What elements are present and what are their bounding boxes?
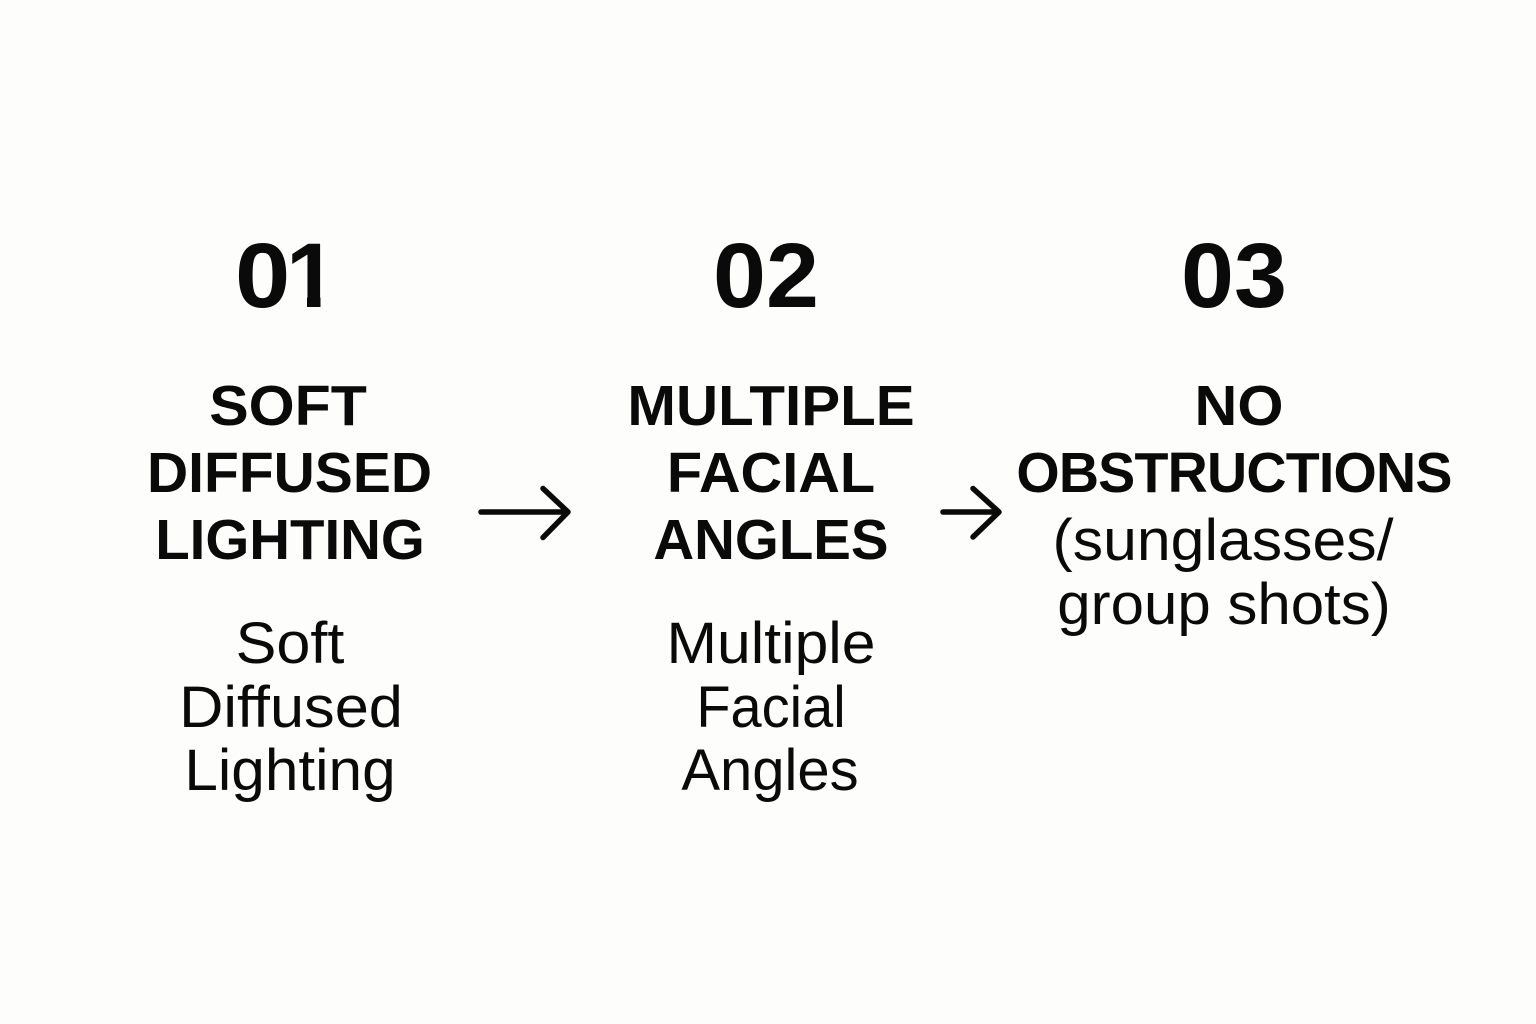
step 1 description: Soft	[235, 611, 344, 676]
step 1 heading	[147, 374, 432, 572]
step 2 heading: FACIAL	[667, 441, 875, 505]
step 1 description	[179, 611, 402, 803]
step 3 heading	[1016, 374, 1452, 505]
step 2 description: Facial	[696, 674, 846, 740]
step 1 heading: DIFFUSED	[147, 441, 432, 505]
step 3 description: group shots)	[1057, 572, 1391, 636]
step 1 number	[235, 225, 320, 327]
arrow: step 2 to step 3	[940, 486, 1002, 540]
step 3 heading: OBSTRUCTIONS	[1016, 441, 1452, 505]
step 2 heading: MULTIPLE	[627, 374, 914, 438]
step 2 heading: ANGLES	[653, 508, 889, 572]
step 2 heading	[627, 374, 914, 572]
step 3 number: 03	[1181, 225, 1287, 327]
step 2 number: 02	[713, 225, 818, 327]
step 1 description: Lighting	[184, 738, 395, 803]
step 1 heading: LIGHTING	[155, 508, 424, 572]
step 2 description: Angles	[681, 738, 859, 803]
step 2 description: Multiple	[666, 611, 876, 676]
step 3 heading: NO	[1194, 374, 1283, 438]
step 3 description	[1053, 508, 1394, 636]
step 1 description: Diffused	[179, 674, 402, 740]
step 3 description: (sunglasses/	[1053, 508, 1393, 573]
step 1 number: 1	[286, 225, 337, 327]
step 2 description	[666, 611, 876, 803]
arrow: step 1 to step 2	[478, 486, 571, 540]
step 1 number: 0	[235, 225, 290, 327]
step 1 heading: SOFT	[209, 374, 366, 438]
